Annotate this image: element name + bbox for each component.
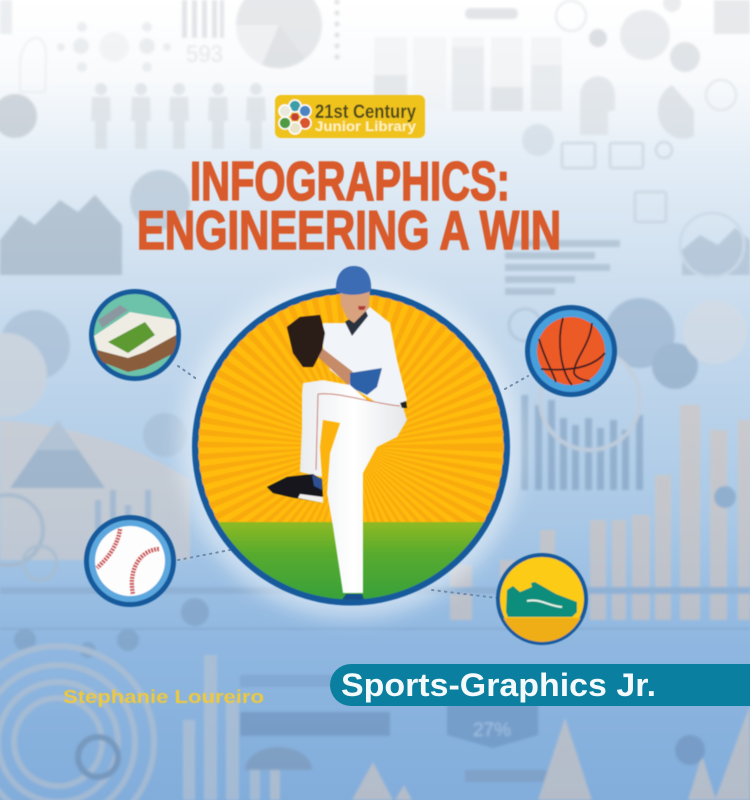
concentric rings: [0, 646, 154, 800]
face: [340, 290, 370, 323]
people row: [91, 83, 266, 149]
glove: [287, 315, 325, 367]
peach swoosh and pyramid: [0, 420, 190, 580]
left small bars: [95, 490, 151, 530]
piping: [316, 394, 400, 470]
right area chart: [682, 228, 750, 275]
top left icons: [0, 0, 171, 92]
pants: [300, 380, 407, 593]
logo line two: Junior Library: [315, 119, 417, 134]
title line two: ENGINEERING A WIN: [137, 199, 561, 261]
grass: [218, 521, 484, 600]
ball: [537, 317, 605, 385]
title: [137, 150, 561, 261]
flower icon: [279, 100, 311, 134]
standing foot: [342, 594, 364, 600]
scattered lower circles: [14, 486, 736, 658]
dome: [245, 747, 312, 770]
shoe badge: [495, 553, 590, 648]
cap: [336, 266, 371, 295]
top right circles: [465, 0, 750, 110]
peach towers: [450, 405, 750, 620]
monitor icons: [522, 124, 672, 222]
people rows: [240, 675, 390, 736]
small ring: [78, 737, 118, 777]
pie chart: [236, 0, 322, 68]
soft glow behind main circle: [179, 274, 523, 618]
sunburst rays: [266, 361, 436, 531]
lower towers: [183, 655, 239, 800]
mid circles: [0, 298, 747, 457]
peach triangles: [352, 705, 750, 800]
silhouette head and pie: [0, 76, 694, 139]
small shield: [675, 735, 705, 765]
legend dots: [334, 0, 340, 60]
basketball badge: [525, 305, 617, 397]
main circle: [190, 288, 515, 612]
right blue bars: [521, 395, 643, 490]
grid lines panel: [465, 770, 580, 782]
field: [108, 322, 155, 353]
sleeve: [350, 368, 382, 395]
series logo: [275, 95, 425, 138]
horizontal bars: [505, 240, 620, 295]
shoe: [506, 582, 577, 617]
grey disc: [130, 170, 190, 230]
series name: Sports-Graphics Jr.: [341, 667, 656, 703]
number 593: 593: [186, 41, 223, 68]
stadium badge: [89, 289, 181, 381]
forearm: [315, 348, 353, 386]
left area chart: [0, 195, 122, 275]
ball: [95, 526, 165, 596]
hexagon with percent: 27%: [473, 720, 511, 741]
striped bars: [182, 0, 224, 38]
logo line one: 21st Century: [315, 102, 416, 123]
author name: Stephanie Loureiro: [63, 687, 264, 707]
raised shoe: [267, 474, 323, 503]
pitcher: [267, 266, 407, 600]
stacked bars: [374, 37, 562, 111]
stadium stands: [94, 312, 176, 364]
jersey: [323, 307, 407, 407]
series banner: [330, 664, 750, 706]
horizontal band: [0, 587, 750, 594]
belt: [400, 401, 407, 408]
hexagon with percent: [447, 705, 538, 748]
right arc: [540, 350, 640, 450]
title line one: INFOGRAPHICS:: [190, 150, 510, 212]
baseball badge: [84, 515, 176, 607]
connector dots: [178, 366, 528, 598]
